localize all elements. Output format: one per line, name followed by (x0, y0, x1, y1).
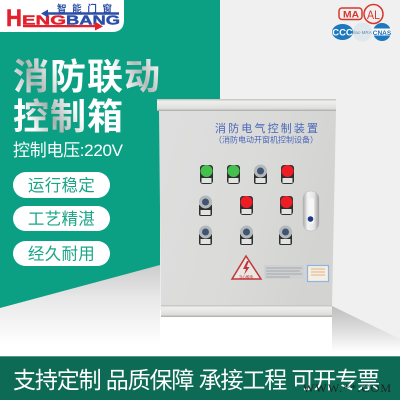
button: red 1 (281, 165, 294, 184)
control cabinet (157, 99, 336, 317)
pill: durable: 经久耐用 (28, 244, 95, 264)
button: red 2 (240, 196, 253, 215)
pill: stable: 运行稳定 (28, 176, 95, 195)
spec label (264, 265, 304, 279)
banner text: 支持定制 品质保障 承接工程 可开专票 (13, 367, 380, 393)
watermark: WWW.**.COM (303, 381, 391, 395)
button: green 2 (227, 165, 240, 184)
logo: CNAS: CNAS (373, 30, 392, 37)
logo wordmark: H (6, 5, 22, 32)
rotary switch 1 (254, 164, 267, 184)
logo chinese text: 智能门窗 (57, 3, 112, 15)
logo wordmark: BANG (66, 12, 120, 28)
logo (0, 0, 124, 32)
title: 消防联动 (13, 56, 161, 97)
panel subheading: （消防电动开窗机控制设备） (214, 134, 318, 144)
button: red 3 (280, 196, 293, 215)
logo arrows (41, 10, 119, 18)
logo wordmark (6, 5, 120, 32)
rotary switch 5 (279, 226, 292, 245)
pill: craft (13, 206, 110, 231)
rotary switch 3 (199, 226, 212, 245)
logo: CAL: AL (367, 8, 380, 22)
logo: CMA: MA (343, 10, 359, 20)
pill: stable (13, 172, 110, 198)
bottom banner (0, 356, 400, 400)
logo: CCC: CCC (332, 28, 353, 38)
button: green 1 (200, 165, 213, 184)
certification logos (332, 4, 392, 42)
warning triangle: 当心触电 (239, 274, 253, 279)
warning triangle (232, 256, 261, 279)
bottom flange (161, 305, 332, 317)
green panel (0, 0, 220, 308)
pill: durable (13, 241, 110, 266)
rotary switch 2 (199, 196, 212, 216)
certificate sticker (308, 266, 328, 282)
top flange (157, 99, 336, 111)
title: 控制箱 (13, 96, 124, 137)
pill: craft: 工艺精湛 (28, 210, 95, 228)
logo wordmark: ENG (22, 12, 66, 28)
cabinet body (159, 110, 336, 306)
door handle (303, 191, 319, 231)
voltage line: 控制电压:220V (13, 141, 124, 160)
rotary switch 4 (240, 226, 253, 245)
floor shadow (0, 258, 400, 356)
title (13, 56, 161, 137)
logo: ilac-MRA: ilac-MRA (353, 30, 372, 35)
panel heading: 消防电气控制装置 (215, 121, 318, 135)
